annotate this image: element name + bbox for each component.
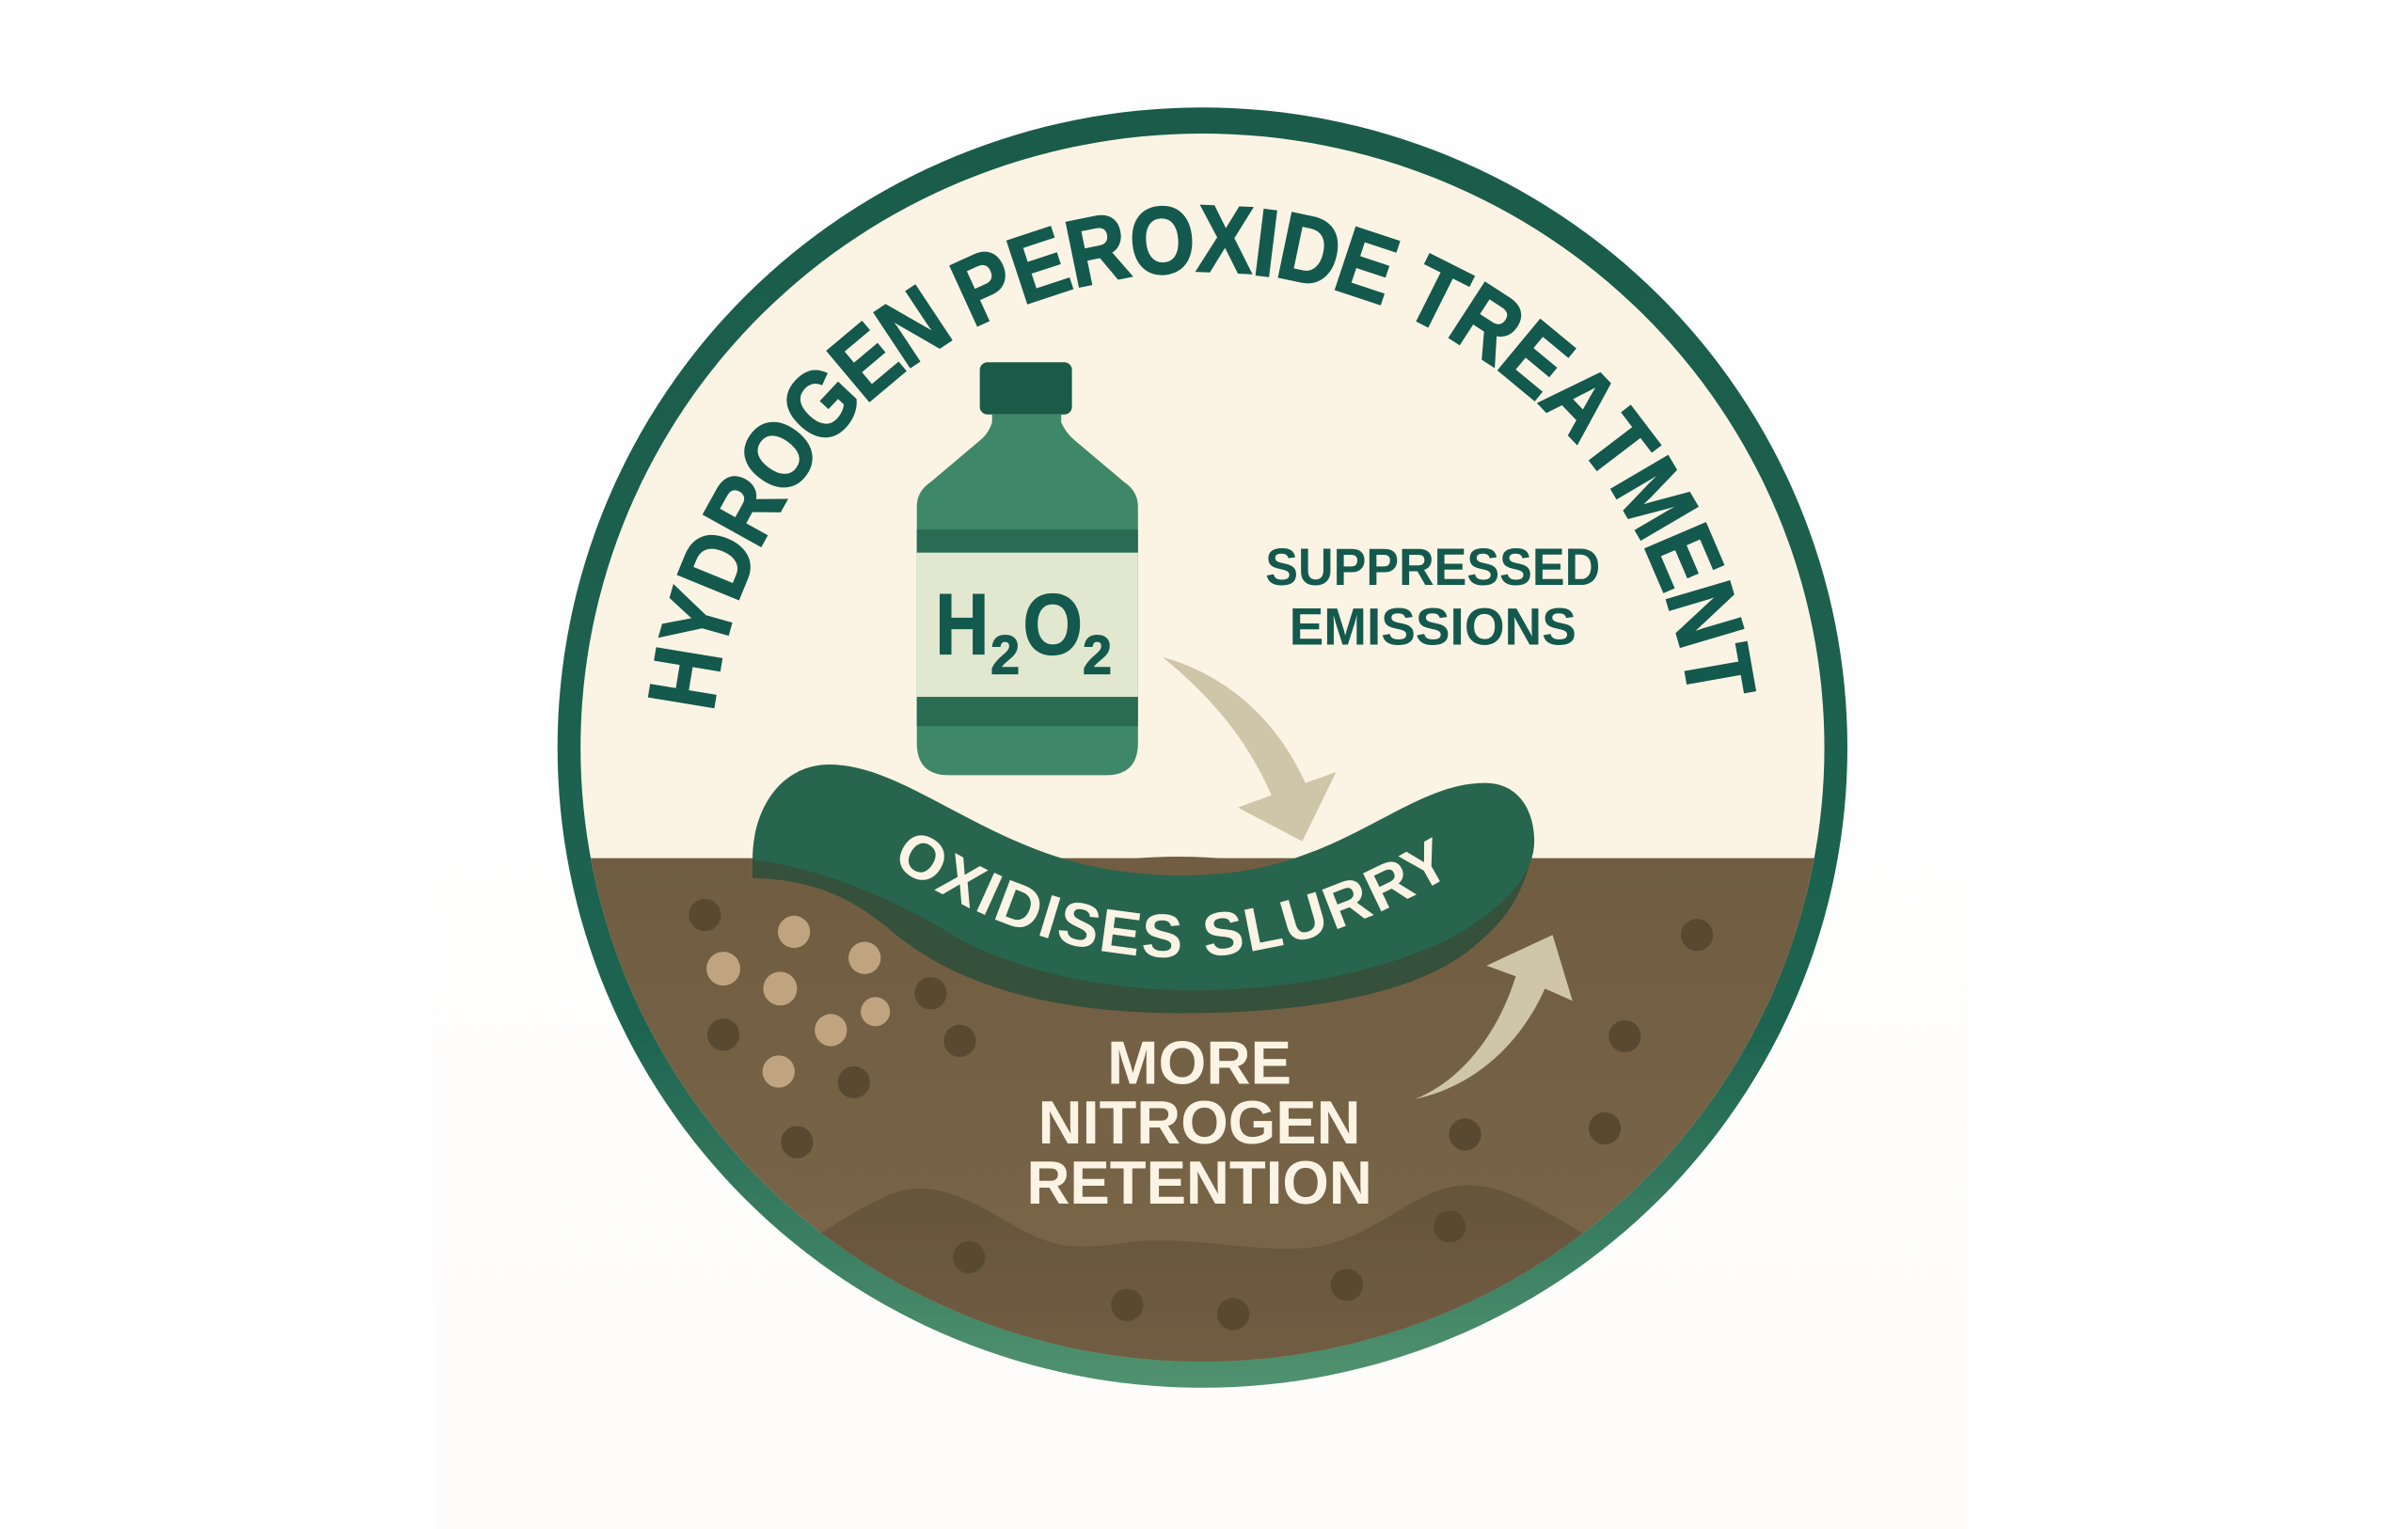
title: E — [1481, 301, 1592, 418]
title: E — [811, 304, 922, 420]
text: suppressed emissions: SUPPRESSED — [1265, 538, 1600, 596]
title: T — [1561, 393, 1676, 498]
bottle label: H2O2 — [935, 576, 1112, 686]
title: X — [1196, 186, 1256, 294]
title: R — [1434, 263, 1542, 385]
soil ground — [568, 857, 1843, 1381]
badge: circular emblem — [558, 107, 1847, 1388]
title: R — [684, 457, 806, 561]
title: P — [937, 228, 1032, 347]
title: H — [629, 639, 743, 717]
text: more nitrogen retention: MORE — [1107, 1029, 1291, 1097]
title: G — [760, 344, 882, 465]
title: E — [1323, 207, 1410, 325]
title: T — [1661, 638, 1774, 706]
title: N — [859, 266, 968, 387]
text: more nitrogen retention: NITROGEN — [1038, 1088, 1361, 1157]
band label: OXIDISES SLURRY — [899, 835, 1440, 957]
arrow: upward from soil — [1415, 935, 1573, 1099]
title: D — [657, 516, 779, 612]
title: N — [1645, 571, 1764, 658]
title: I — [1248, 190, 1284, 297]
soil particles: dark — [689, 899, 1713, 1331]
bottle label: H2O2: H — [935, 576, 989, 672]
title: O — [717, 398, 841, 512]
text: more nitrogen retention — [1026, 1029, 1372, 1217]
text: more nitrogen retention: RETENTION — [1026, 1148, 1372, 1217]
title: T — [1390, 236, 1483, 354]
slurry band — [752, 764, 1535, 1014]
text: suppressed emissions — [1265, 538, 1600, 656]
title: R — [1057, 193, 1137, 308]
arrow: down into slurry — [1163, 657, 1336, 842]
title: Y — [641, 579, 757, 662]
title: D — [1269, 193, 1350, 308]
bottle label: H2O2: O — [1022, 576, 1083, 672]
title — [629, 186, 1774, 717]
title: E — [996, 207, 1082, 325]
title: O — [1126, 186, 1199, 296]
bottle label: H2O2: 2 — [1083, 625, 1112, 686]
icon: H2O2 bottle — [917, 362, 1138, 775]
title: A — [1522, 343, 1640, 460]
title: E — [1624, 511, 1743, 604]
text: suppressed emissions: EMISSIONS — [1290, 598, 1576, 656]
soil particles: light nitrogen — [706, 916, 890, 1088]
bottle label: H2O2: 2 — [990, 625, 1020, 686]
title: M — [1591, 441, 1718, 555]
